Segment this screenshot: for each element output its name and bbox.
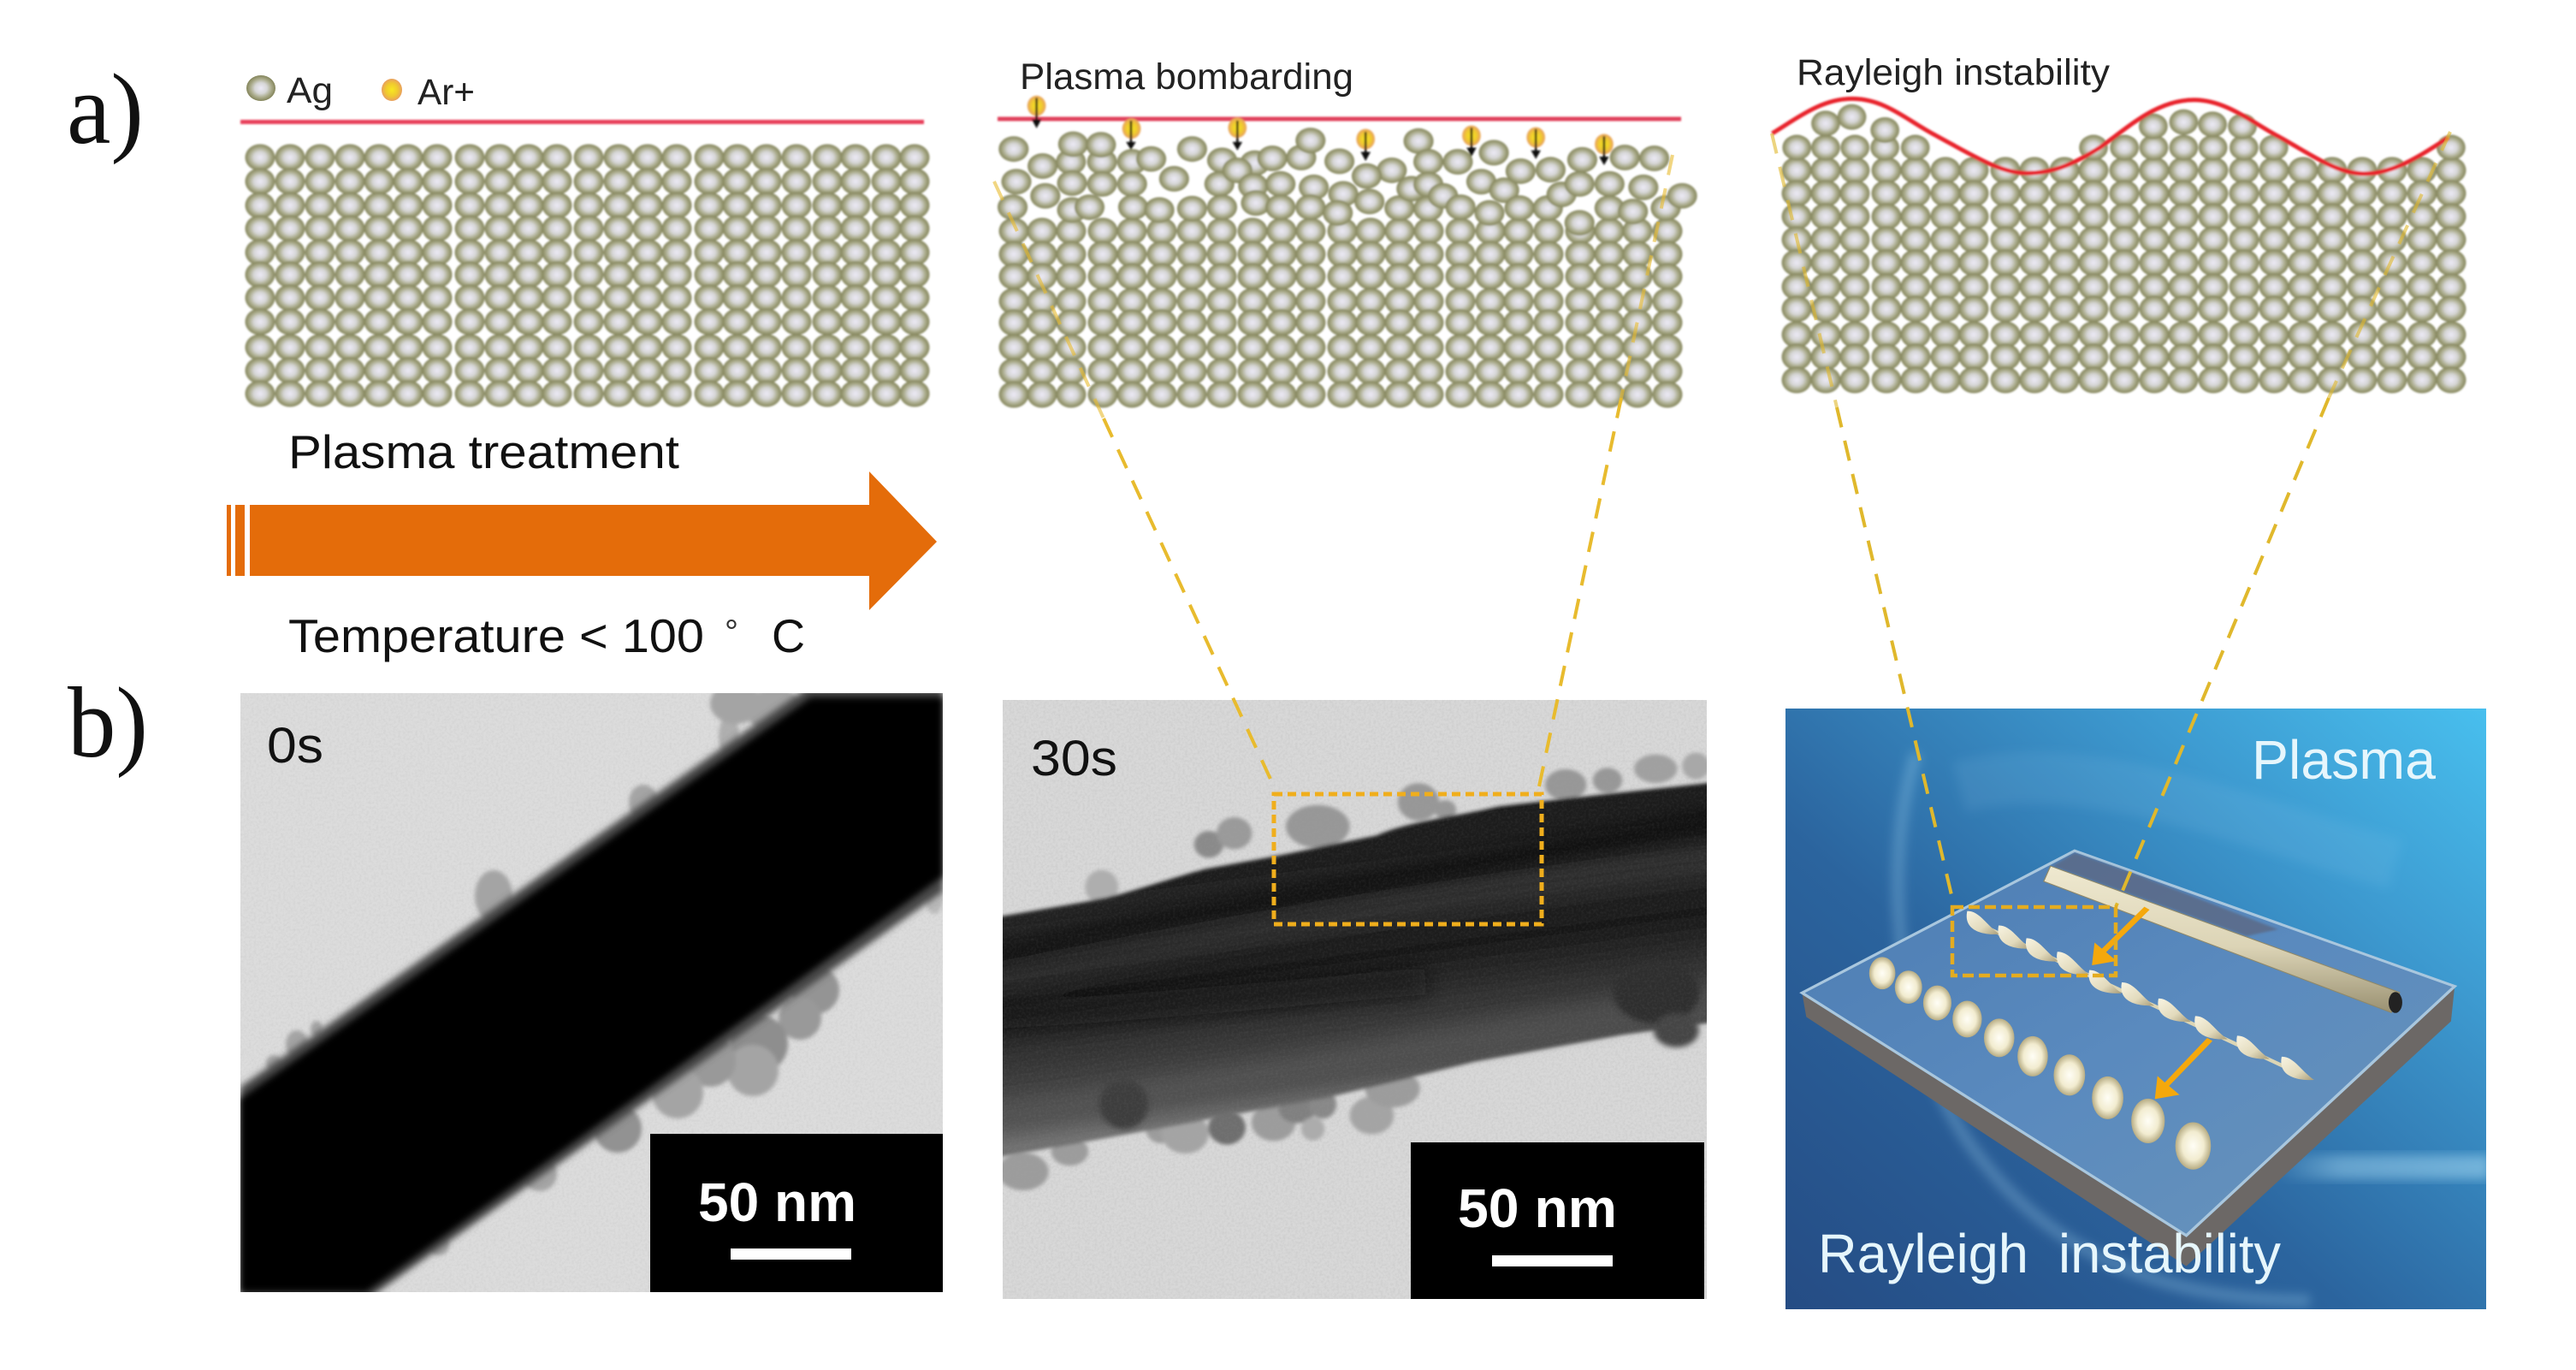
heading: panel a label: a) <box>67 53 144 165</box>
callout: zoom lines and box on schematic <box>1772 132 2450 976</box>
text: Plasma bombarding: Plasma bombarding <box>1020 56 1353 98</box>
scale bar <box>1492 1255 1613 1266</box>
separated droplets <box>1869 957 2211 1170</box>
nanowire body <box>240 697 943 1292</box>
substrate sides <box>1802 987 2455 1266</box>
scale text: 50 nm <box>698 1171 856 1233</box>
device artwork <box>1802 851 2455 1266</box>
text: Temperature condition: Temperature < 100 <box>288 609 704 662</box>
legend: Ag and Ar+ <box>246 70 475 113</box>
substrate top <box>1802 851 2455 1236</box>
nanowire halo <box>240 689 943 1297</box>
text: Temperature condition: C <box>772 609 805 662</box>
text: Temperature condition: ° <box>725 614 738 651</box>
nanowire streaks <box>955 815 1750 1120</box>
dashed box <box>1274 794 1542 924</box>
horizontal glow <box>2276 1155 2490 1179</box>
raised surface atoms <box>1782 104 2466 160</box>
panel: pristine Ag lattice <box>240 120 929 407</box>
image grain <box>1003 700 1711 1299</box>
surface line <box>998 116 1681 122</box>
nanowire body <box>993 782 1720 1158</box>
heading: panel b label: b) <box>68 667 148 779</box>
panel: TEM image 0s <box>240 683 943 1297</box>
arrow: process direction <box>227 471 937 610</box>
legend text: Ag: Ag <box>287 70 333 111</box>
arrow: chain to droplets <box>2155 1038 2212 1099</box>
upper particles <box>1085 752 1709 904</box>
icon: Ar+ ion <box>382 79 402 101</box>
icon: Ag atom <box>246 75 275 101</box>
scale bar <box>731 1248 851 1260</box>
dashed zoom lines over atoms <box>994 155 1673 418</box>
atom lattice <box>1781 157 2466 394</box>
scattered surface atoms <box>998 128 1697 235</box>
dark reflection band <box>2052 853 2278 936</box>
panel: Rayleigh instability lattice <box>1772 98 2466 394</box>
text: Rayleigh instability caption: Rayleigh instability <box>1797 52 2111 93</box>
light swooshes <box>1898 753 2395 1301</box>
arrow: wire to chain <box>2092 907 2150 965</box>
label: Rayleigh instability: Rayleigh instability <box>1818 1223 2281 1284</box>
atom lattice <box>245 144 929 407</box>
dashed zoom lines <box>1837 398 2329 907</box>
surface particles <box>266 683 943 1255</box>
nanoparticles and nanowire <box>1003 751 1707 1193</box>
lower particles <box>998 1070 1420 1190</box>
nanowire <box>2044 866 2402 1013</box>
scale box <box>650 1134 943 1292</box>
time label: 30s <box>1031 731 1117 786</box>
blue background <box>1785 709 2486 1309</box>
panel: Rayleigh instability schematic <box>1785 709 2490 1309</box>
legend text: Ar+: Ar+ <box>417 72 475 113</box>
necking wire chain <box>1967 911 2314 1080</box>
label: Plasma: Plasma <box>2252 729 2436 791</box>
Ar+ ions with arrows <box>1027 96 1614 165</box>
dashed box <box>1952 907 2116 976</box>
callout: zoom lines and box on 30s TEM <box>994 155 1673 924</box>
dark particles on nanowire <box>1099 961 1700 1129</box>
dashed zoom lines <box>1104 398 1621 786</box>
wavy surface line <box>1772 98 2449 174</box>
TEM background <box>1003 700 1711 1299</box>
scale box <box>1411 1142 1704 1299</box>
text: Plasma treatment: Plasma treatment <box>288 425 679 478</box>
panel: plasma bombarded lattice <box>998 96 1697 407</box>
time label: 0s <box>267 718 323 774</box>
dashed zoom lines over atoms <box>1772 132 2450 407</box>
TEM background <box>240 693 943 1292</box>
background grain <box>1069 709 1697 1297</box>
scale text: 50 nm <box>1458 1177 1617 1239</box>
surface line <box>240 120 924 124</box>
atom lattice <box>999 217 1682 407</box>
panel: TEM image 30s <box>1003 700 1707 1299</box>
background grain <box>240 693 943 1292</box>
